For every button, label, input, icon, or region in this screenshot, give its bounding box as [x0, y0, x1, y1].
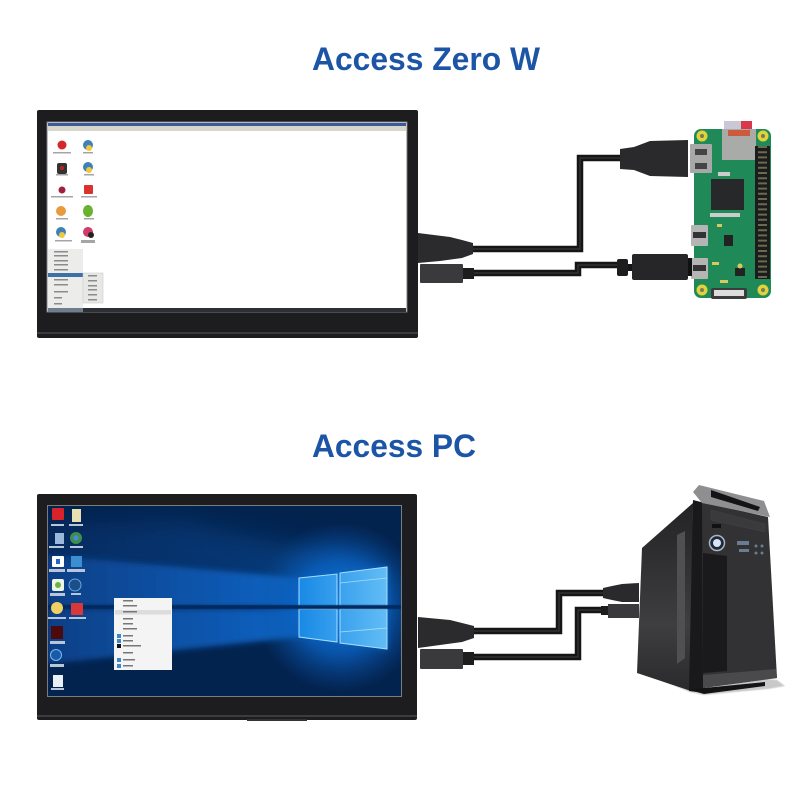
screen: white desktop: [47, 122, 407, 312]
base: [703, 669, 777, 688]
small components: [724, 235, 745, 276]
front IO: [737, 541, 764, 554]
desktop icons: [48, 508, 86, 690]
desktop icons: [51, 140, 97, 243]
connectors: Pi side: [617, 140, 692, 280]
connectors: bottom monitor side: [418, 617, 474, 669]
Raspberry Pi Zero W: [690, 121, 771, 299]
start menu: [48, 249, 103, 308]
PC tower: [637, 485, 785, 695]
connectors: PC side: [601, 583, 639, 618]
sd card: [722, 121, 756, 160]
monitor: bottom with Windows desktop: [37, 494, 430, 721]
connectors: top monitor side: [418, 233, 474, 283]
corner edge: [689, 500, 705, 693]
title: Access Zero W: Access Zero W: [312, 41, 541, 77]
context menu: [114, 598, 172, 670]
tower front panel: [702, 502, 777, 688]
screen: Windows wallpaper: [47, 505, 430, 700]
monitor: top with Raspberry Pi desktop: [37, 110, 418, 338]
cables: bottom monitor to PC: [470, 593, 605, 657]
handle: [693, 485, 770, 517]
windows logo: [299, 567, 387, 649]
title: Access PC: Access PC: [312, 428, 476, 464]
camera connector: [711, 288, 747, 299]
shadow under tower: [640, 668, 785, 695]
ports: [690, 144, 712, 173]
mesh strip: [703, 553, 727, 673]
power button: [710, 536, 724, 550]
cables: top monitor to Pi: [470, 158, 625, 273]
drive bay: [711, 510, 765, 532]
side panel recess: [677, 531, 685, 664]
cpu: [711, 179, 744, 210]
gpio header: [755, 146, 770, 279]
tower side panel: [637, 503, 693, 691]
